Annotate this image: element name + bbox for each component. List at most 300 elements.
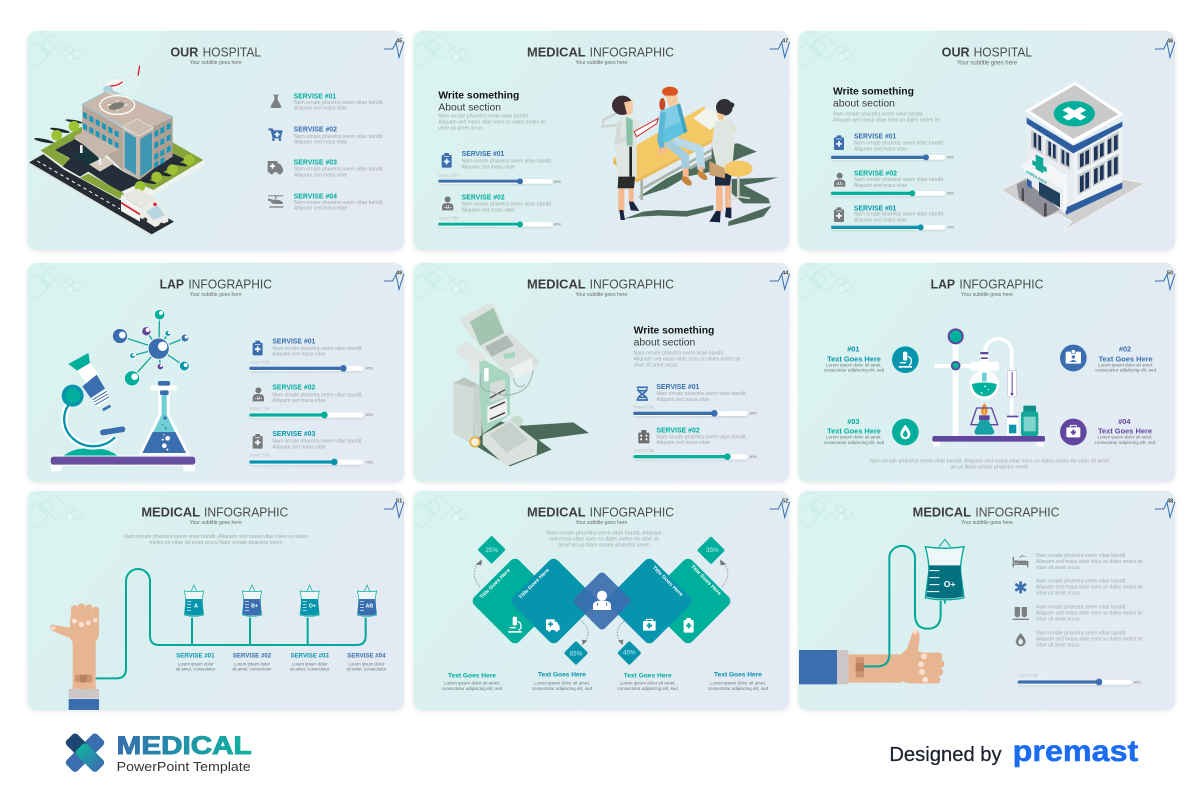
text block 2: Lorem ipsum dolor sit amet, <box>534 681 590 687</box>
description <box>124 534 308 546</box>
percent badge 65% <box>564 641 588 665</box>
caption: Nam ornate pharetra seem vitae bandit. Aliquam sed masa vitae rises so dales moles tie vitae sit amet <box>869 458 1110 464</box>
text block: about: Nam ornate pharetra seem vitae bandit. <box>833 112 924 118</box>
text block: about: Aliquam sed masa vitae rises so dales moles tie <box>833 118 940 124</box>
heading: MEDICAL <box>527 504 586 519</box>
service 1 text: Nam ornate pharetra seem vitae bandit. <box>854 140 944 146</box>
text item 4: Aliquam sed masa vitae rises so dales moles tie <box>1036 636 1143 642</box>
icon: doctor <box>442 196 453 210</box>
panel: medical infographic, slide 48 <box>793 487 1175 710</box>
text item 3: vitae sit amet arcus <box>1036 616 1080 622</box>
slider 3: 70% <box>947 225 954 229</box>
icon: pulse line with slide number <box>770 271 790 289</box>
service 3 text <box>272 429 363 450</box>
text block: about <box>634 326 741 369</box>
service 1 text: SERVISE #01 <box>272 336 316 345</box>
icon: clipboard grey <box>834 207 844 222</box>
service 1 text: Nam ornate pharetra seem vitae bandit. <box>462 158 552 164</box>
icon: pulse line with slide number <box>770 39 790 57</box>
text block 2 <box>532 672 592 692</box>
text block: about: Write something <box>438 90 519 101</box>
arrow: to 35% <box>720 559 728 587</box>
panel background <box>798 263 1175 482</box>
heading: INFOGRAPHIC <box>590 504 674 519</box>
heading: MEDICAL <box>527 276 586 291</box>
heading: MEDICAL <box>527 44 586 59</box>
service 3 text: Aliquam sed masa vitae <box>854 218 907 224</box>
text item 3: Aliquam sed masa vitae rises so dales moles tie <box>1036 610 1143 616</box>
heading <box>527 504 674 519</box>
service 1 text: SERVISE #01 <box>462 149 505 158</box>
icon: hospital building <box>638 430 649 443</box>
illustration: molecule <box>112 309 189 386</box>
heading: OUR <box>942 44 970 59</box>
diamond label 1: Title Goes Here <box>479 567 512 600</box>
service 3 text: Nam ornate pharetra seem vitae bandit. <box>272 439 363 445</box>
illustration: distillation apparatus <box>932 329 1045 446</box>
icon: doctor <box>593 591 611 610</box>
icon: pulse line with slide number <box>770 499 790 517</box>
subtitle: Your subtitle goes here <box>961 292 1013 298</box>
service 1 text: SERVISE #01 <box>854 131 897 140</box>
text block: about: about section <box>833 99 895 110</box>
slider 1 <box>633 405 757 417</box>
service 2 text: Aliquam sed masa vitae <box>656 440 710 446</box>
service 1 text <box>272 336 363 358</box>
slider: 80% <box>1134 680 1141 684</box>
heading: INFOGRAPHIC <box>959 276 1043 291</box>
service 2 text: Aliquam sed masa vitae <box>272 398 326 404</box>
slider 1: 80% <box>554 180 561 184</box>
slider 2: 60% <box>947 192 954 196</box>
callout 01 text: Lorem ipsum dolor sit amet, <box>826 362 882 368</box>
heading: MEDICAL <box>913 504 971 519</box>
panel: our hospital, slide 46 <box>793 27 1175 251</box>
text block: about: Nam ornate pharetra seem vitae bandit. <box>634 351 724 357</box>
text item 3: Nam ornate pharetra seem vitae bandit. <box>1036 604 1127 610</box>
diamond label 2: Title Goes Here <box>518 567 551 600</box>
illustration: O+ blood bag: O+ <box>944 579 956 589</box>
service 2 text: SERVISE #02 <box>854 169 897 178</box>
slider 2 <box>249 406 373 418</box>
illustration: isometric hospital <box>29 66 205 236</box>
panel background <box>27 263 404 482</box>
service 1 text: Nam ornate pharetra seem vitae bandit. <box>272 346 363 352</box>
slider 2: Insert Title <box>634 448 655 453</box>
heading: MEDICAL <box>141 504 200 519</box>
panel: medical infographic, slide 52 <box>408 487 790 710</box>
panel background <box>798 31 1175 251</box>
service 2 text: Nam ornate pharetra seem vitae bandit. <box>462 202 552 208</box>
icon: drop <box>1016 633 1026 646</box>
text block 4: consectetur adipiscing elit, sed <box>708 686 768 692</box>
service 4 text: SERVISE #04 <box>294 191 338 200</box>
diamond label 4: Title Goes Here <box>689 564 722 597</box>
service 2 text <box>462 193 552 214</box>
slider 2: 80% <box>554 223 561 227</box>
text block 4 <box>708 672 768 692</box>
text block: about: Write something <box>634 326 714 337</box>
text block 3: Text Goes Here <box>624 672 672 679</box>
subtitle: Your subtitle goes here <box>575 60 627 66</box>
text item 1: Aliquam sed masa vitae rises so dales moles tie <box>1036 559 1143 565</box>
text block: about: about section <box>634 338 695 349</box>
icon: pulse line with slide number <box>1155 271 1175 289</box>
service 4 text <box>294 191 384 212</box>
callout 04 text: Text Goes Here <box>1098 427 1152 436</box>
heading <box>913 504 1059 519</box>
icon: doctor <box>253 387 264 401</box>
description <box>546 531 661 549</box>
slider 3 <box>249 453 373 465</box>
text block: about: About section <box>438 102 501 113</box>
service 1 text <box>462 149 552 170</box>
slider 2: 80% <box>750 455 757 459</box>
diagram: diamonds <box>470 556 733 646</box>
text item 4: Nam ornate pharetra seem vitae bandit. <box>1036 630 1127 636</box>
icon: test tubes <box>1013 607 1029 620</box>
callout 02 text: #02 <box>1119 345 1131 354</box>
callout 04 text: Lorem ipsum dolor sit amet, <box>1097 435 1152 441</box>
text block 3 <box>617 672 678 692</box>
panel: medical infographic, slide 51 <box>22 487 404 710</box>
text block: about: vitae sit amet arcus <box>438 126 483 132</box>
service 2 text: Nam ornate pharetra seem vitae bandit. <box>272 392 363 398</box>
slider 1: Insert Title <box>634 405 655 410</box>
service 2 text: Nam ornate pharetra seem vitae bandit. <box>854 177 944 183</box>
slider 3: 70% <box>366 460 373 464</box>
text block: about: vitae sit amet arcus <box>634 363 678 369</box>
service 2 text: SERVISE #02 <box>462 193 505 202</box>
slider 1 <box>438 173 561 184</box>
icon: pulse line with slide number <box>384 499 404 517</box>
service 1 text: Aliquam sed masa vitae <box>854 146 907 152</box>
slider 2: Insert Title <box>250 406 271 411</box>
credit text: Designed by <box>889 743 1002 766</box>
slider 3 <box>831 224 954 230</box>
heading: INFOGRAPHIC <box>188 276 272 291</box>
percent badge 25%: 25% <box>485 547 498 554</box>
service 1 text <box>854 131 944 152</box>
text block: about: Aliquam sed masa vitae rises so dales moles tie <box>634 357 741 363</box>
subtitle: Your subtitle goes here <box>575 292 627 298</box>
callout 03 text: Text Goes Here <box>827 427 881 436</box>
callout 04 text <box>1095 417 1156 446</box>
callout 01 text <box>824 345 884 374</box>
illustration: microscope <box>62 353 126 457</box>
icon: pulse line with slide number: 45 <box>396 39 402 45</box>
service 1 text: SERVISE #01 <box>294 91 337 100</box>
icon: drop badge <box>892 419 919 445</box>
callout 02 text: Text Goes Here <box>1099 354 1153 363</box>
heading: HOSPITAL <box>203 44 261 59</box>
heading <box>527 276 674 291</box>
label 2: sit amet, consectetur <box>232 666 272 672</box>
callout 03 text: #03 <box>847 417 859 426</box>
service list <box>268 91 384 212</box>
premast wordmark: premast <box>1013 735 1139 768</box>
percent badge 45%: 45% <box>623 650 636 657</box>
panel: lap infographic, slide 49 <box>22 259 404 482</box>
illustration: doctors and patient <box>603 87 778 226</box>
panel background <box>413 31 789 251</box>
illustration: blood bag AB: AB <box>365 604 373 610</box>
icon: ambulance <box>546 619 560 632</box>
slider 1: 80% <box>947 156 954 160</box>
service 2 text: SERVISE #02 <box>656 425 700 434</box>
heading: OUR <box>170 44 199 59</box>
heading <box>527 44 674 59</box>
heading: INFOGRAPHIC <box>975 504 1059 519</box>
label 1: Lorem ipsum dolor <box>178 661 214 667</box>
heading: INFOGRAPHIC <box>204 504 288 519</box>
slider 2: 60% <box>366 413 373 417</box>
icon: pulse line with slide number: 49 <box>396 271 402 277</box>
subtitle: Your subtitle goes here <box>961 520 1013 526</box>
text block 4: Lorem ipsum dolor sit amet, <box>710 681 766 687</box>
illustration: raised arm and hand <box>50 604 99 710</box>
panel: lap infographic, slide 50 <box>793 259 1175 482</box>
slider 3: Insert Title <box>250 453 271 458</box>
illustration: O+ blood bag <box>925 539 964 604</box>
text item 3 <box>1036 604 1143 622</box>
icon: cross logo <box>64 732 106 773</box>
text block: about: Aliquam sed masa vitae rises so dales moles tie <box>438 120 546 126</box>
logo tagline: PowerPoint Template <box>117 759 251 774</box>
percent badge 25% <box>478 536 506 564</box>
icon: pulse line with slide number <box>1155 39 1175 57</box>
icon: pulse line with slide number: 52 <box>782 499 788 505</box>
caption: arcus Nam ornate pharetra seem <box>950 464 1028 470</box>
illustration: blood bag AB <box>357 585 377 616</box>
text block 1: Text Goes Here <box>448 672 496 679</box>
callout 03 text: consectetur adipiscing elit, sed <box>824 440 884 446</box>
slider 1: Insert Title <box>439 173 459 178</box>
slider <box>1018 673 1141 685</box>
footer: medical logo <box>64 732 252 774</box>
service 2 text <box>854 169 944 189</box>
text item 2: vitae sit amet arcus <box>1036 590 1080 596</box>
callout 03 text: Lorem ipsum dolor sit amet, <box>826 435 882 441</box>
icon: microscope <box>508 617 522 633</box>
illustration: flask <box>138 381 190 455</box>
text block: about <box>833 87 940 124</box>
illustration: IV tube <box>93 569 366 678</box>
label 4 <box>347 653 386 672</box>
service 2 text: SERVISE #02 <box>272 383 315 392</box>
service 4 text: Aliquam sed masa vitae <box>294 206 347 212</box>
service 3 text: Aliquam sed masa vitae <box>294 172 347 178</box>
text block 4: Text Goes Here <box>714 672 762 679</box>
slider 2: Insert Title <box>439 216 459 221</box>
heading: LAP <box>931 276 955 291</box>
percent badge 45% <box>617 641 642 665</box>
illustration: blood bag O+: O+ <box>309 604 316 610</box>
icon: ambulance <box>268 161 283 174</box>
heading: INFOGRAPHIC <box>590 44 674 59</box>
label 1: sit amet, consectetur <box>176 666 216 672</box>
description: Nam ornate pharetra seem vitae bandit. Aliquam sed masa vitae rises so dales <box>124 534 308 540</box>
diamond label 3: Title Goes Here <box>651 565 684 598</box>
service 1 text: Aliquam sed masa vitae <box>656 397 710 403</box>
callout 03 text <box>824 417 884 446</box>
icon: doctor <box>834 173 845 187</box>
text item 2: Aliquam sed masa vitae rises so dales moles tie <box>1036 584 1143 590</box>
text block 2: Text Goes Here <box>538 672 586 679</box>
service 1 text: Aliquam sed masa vitae <box>272 352 326 358</box>
label 4: sit amet, consectetur <box>347 666 386 672</box>
icon: pulse line with slide number: 50 <box>1167 271 1173 277</box>
illustration: blood bag B+ <box>242 585 262 616</box>
text block: about: Nam ornate pharetra seem vitae bandit. <box>438 114 529 120</box>
slider 1 <box>249 360 373 372</box>
service 3 text: SERVISE #01 <box>854 203 897 212</box>
text item 4: vitae sit amet arcus <box>1036 642 1080 648</box>
panel background <box>27 491 404 710</box>
heading: LAP <box>160 276 184 291</box>
panel background <box>413 263 789 482</box>
service 2 text: Nam ornate pharetra seem vitae bandit. <box>656 434 747 440</box>
text block 3: Lorem ipsum dolor sit amet, <box>620 681 676 687</box>
label 3: sit amet, consectetur <box>290 666 330 672</box>
callout 01 text: Text Goes Here <box>827 354 881 363</box>
icon: pulse line with slide number <box>384 271 404 289</box>
text item 2 <box>1036 578 1143 596</box>
percent badge 35%: 35% <box>706 547 719 554</box>
service 3 text: Nam ornate pharetra seem vitae bandit. <box>294 166 384 172</box>
service 3 text <box>294 157 384 178</box>
service 1 text: Nam ornate pharetra seem vitae bandit. <box>294 100 384 106</box>
icon: pulse line with slide number: 51 <box>396 499 402 505</box>
icon: DNA <box>637 387 648 400</box>
slider 1 <box>831 154 954 160</box>
text block 1: consectetur adipiscing elit, sed <box>442 686 502 692</box>
slider 2 <box>438 216 561 227</box>
heading: INFOGRAPHIC <box>590 276 674 291</box>
text block 3: consectetur adipiscing elit, sed <box>617 686 678 692</box>
service 3 text: SERVISE #03 <box>294 157 337 166</box>
subtitle: Your subtitle goes here <box>190 292 242 298</box>
description: moles tie vitae sit amet arcus Nam ornate pharetra seem <box>149 540 283 546</box>
service 3 text: SERVISE #03 <box>272 429 315 438</box>
subtitle: Your subtitle goes here <box>190 60 242 66</box>
illustration: lab bench <box>50 455 196 471</box>
panel: medical infographic, slide 44 <box>408 259 790 482</box>
heading <box>942 44 1032 59</box>
description: sed masa vitae rises so dales moles tie vitae sit <box>549 537 659 543</box>
slider 1: Insert Title <box>250 360 271 365</box>
text block 2: consectetur adipiscing elit, sed <box>532 686 592 692</box>
icon: pulse line with slide number: 48 <box>1167 499 1173 505</box>
service 2 text: Aliquam sed masa vitae <box>854 183 907 189</box>
illustration: blood bag O+ <box>300 585 319 616</box>
panel background <box>27 31 404 251</box>
subtitle: Your subtitle goes here <box>575 520 627 526</box>
service 3 text: Aliquam sed masa vitae <box>272 444 326 450</box>
subtitle: Your subtitle goes here <box>957 60 1018 66</box>
service 1 text: Aliquam sed masa vitae <box>462 164 515 170</box>
icon: pulse line with slide number: 44 <box>782 271 789 277</box>
service 1 text <box>294 91 384 112</box>
heading: HOSPITAL <box>974 44 1032 59</box>
slider 2 <box>831 190 954 196</box>
label 3: SERVISE #03 <box>290 653 329 660</box>
icon: pulse line with slide number <box>1155 499 1175 517</box>
icon: asterisk <box>1015 581 1026 593</box>
label 1: SERVISE #01 <box>176 653 215 660</box>
icon: id badge <box>1060 345 1087 371</box>
heading <box>170 44 261 59</box>
service 1 text: Aliquam sed masa vitae <box>294 106 347 112</box>
arrow: to 25% <box>474 559 482 587</box>
label 4: SERVISE #04 <box>347 653 386 660</box>
icon: cart <box>268 128 283 141</box>
label 2 <box>232 653 272 672</box>
callout 01 text: #01 <box>847 345 859 354</box>
icon: clipboard grey <box>253 434 263 449</box>
service 2 text: Aliquam sed masa vitae <box>462 208 515 214</box>
percent badge 65%: 65% <box>570 650 583 657</box>
footer: designed by premast <box>889 735 1139 768</box>
illustration: blood bag A: A <box>194 604 198 610</box>
slider 2 <box>633 448 757 460</box>
label 1 <box>176 653 216 672</box>
slider: Insert Title <box>1018 673 1039 678</box>
text block 1: Lorem ipsum dolor sit amet, <box>444 681 500 687</box>
label 2: Lorem ipsum dolor <box>234 661 270 667</box>
text item 1: Nam ornate pharetra seem vitae bandit. <box>1036 553 1127 559</box>
label 2: SERVISE #02 <box>233 653 271 660</box>
text item 1: vitae sit amet arcus <box>1036 565 1080 571</box>
description: amet arcus Nam ornate pharetra seem <box>558 543 650 549</box>
caption <box>869 458 1110 470</box>
panel: our hospital, slide 45 <box>22 27 404 251</box>
icon: clipboard <box>442 153 452 168</box>
service 4 text: Nam ornate pharetra seem vitae bandit. <box>294 200 384 206</box>
icon: clipboard <box>253 341 263 355</box>
service 2 text <box>272 383 363 404</box>
illustration: blood bag A <box>184 585 204 616</box>
icon: pulse line with slide number: 47 <box>782 39 788 45</box>
icon: hospital bed <box>1013 555 1028 567</box>
callout 04 text: #04 <box>1118 417 1131 426</box>
service 2 text: Aliquam sed masa vitae <box>294 140 347 146</box>
callout 02 text <box>1095 345 1156 374</box>
slider 1: 60% <box>750 412 757 416</box>
icon: flask <box>271 95 281 108</box>
icon: medical kit <box>643 619 656 631</box>
service 3 text <box>854 203 944 224</box>
label 3: Lorem ipsum dolor <box>292 661 328 667</box>
icon: clipboard <box>834 135 844 150</box>
label 3 <box>290 653 330 672</box>
text item 2: Nam ornate pharetra seem vitae bandit. <box>1036 578 1127 584</box>
heading <box>141 504 288 519</box>
panel background <box>413 491 789 710</box>
icon: first aid kit badge <box>1060 419 1087 445</box>
illustration: isometric clinic building <box>1002 82 1145 231</box>
panel background <box>798 491 1175 710</box>
service 1 text: Nam ornate pharetra seem vitae bandit. <box>656 391 747 397</box>
service 2 text: SERVISE #02 <box>294 125 337 134</box>
illustration: isometric clinic building: AMBULANCE <box>1025 170 1048 185</box>
icon: pulse line with slide number: 46 <box>1167 39 1173 45</box>
panel: medical infographic, slide 47 <box>408 27 790 251</box>
icon: pulse line with slide number <box>384 39 404 57</box>
service 2 text <box>294 125 384 146</box>
percent badge 35% <box>697 536 725 564</box>
service 3 text: Nam ornate pharetra seem vitae bandit. <box>854 212 944 218</box>
